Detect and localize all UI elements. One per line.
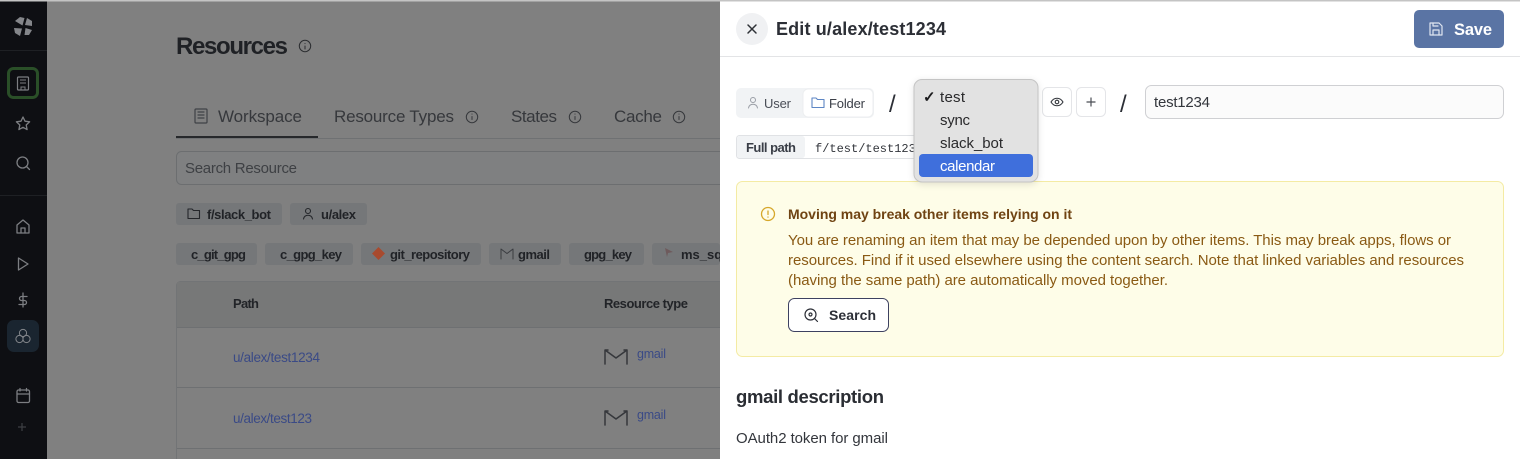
row: test1234	[233, 347, 666, 365]
icon: info	[299, 40, 311, 52]
folder dropdown menu: slack_bot	[940, 135, 1004, 152]
alert body: (having the same path) are automatically moved together.	[788, 272, 1168, 289]
icon: play	[18, 258, 28, 270]
folder dropdown menu: ✓	[923, 89, 936, 106]
search resource input	[176, 152, 776, 184]
resource type chips: c_gpg_key	[280, 247, 343, 262]
search resource input: Search Resource	[185, 160, 297, 177]
icon: dollar	[19, 293, 27, 307]
resource table: Resource type	[604, 296, 688, 311]
icon: workspace selected	[8, 68, 38, 98]
top edge line	[0, 0, 1520, 2]
owner toggle	[736, 88, 874, 118]
icon: star	[16, 117, 30, 130]
full path	[736, 136, 936, 158]
row: test123: u/alex/test123	[233, 411, 312, 426]
resource type chips	[176, 243, 726, 265]
name input: test1234	[1154, 94, 1210, 111]
alert body: You are renaming an item that may be depended upon by other items. This may break apps, flows or	[788, 232, 1451, 249]
edit drawer panel	[720, 0, 1520, 459]
row: test1234: gmail	[637, 347, 666, 361]
icon: calendar	[17, 388, 30, 402]
folder and user filter chips: f/slack_bot	[207, 207, 272, 222]
icon: search	[17, 157, 30, 170]
icon: home	[17, 220, 29, 233]
slash separator: /	[889, 91, 896, 118]
tabs: Workspace	[218, 107, 302, 126]
alert heading: Moving may break other items relying on it	[788, 206, 1072, 222]
close button	[736, 13, 768, 45]
page heading: Resources: Resources	[176, 33, 288, 60]
row: test123	[233, 408, 666, 426]
owner toggle: Folder	[829, 96, 866, 111]
tabs: Resource Types	[334, 107, 454, 126]
resource table: Path	[233, 296, 259, 311]
folder dropdown menu	[914, 80, 1038, 184]
folder and user filter chips	[176, 203, 367, 225]
folder and user filter chips: u/alex	[321, 207, 357, 222]
warning alert	[736, 182, 1504, 356]
name input	[1146, 86, 1504, 118]
folder dropdown menu: sync	[940, 112, 970, 129]
slash separator: /	[1120, 91, 1127, 118]
drawer title: Edit u/alex/test1234	[776, 19, 946, 39]
description heading: gmail description	[736, 386, 884, 407]
icon: resources active	[7, 320, 39, 352]
search button: Search	[829, 307, 876, 323]
icon: warning	[762, 208, 774, 220]
full path: Full path	[746, 140, 796, 155]
tabs: Cache	[614, 107, 662, 126]
folder dropdown menu: test	[940, 89, 966, 106]
resource table	[176, 282, 737, 459]
row: test1234: u/alex/test1234	[233, 350, 320, 365]
sidebar	[0, 0, 47, 459]
alert body: resources. Find if it used elsewhere using the content search. Note that linked variables and resources	[788, 252, 1464, 269]
alert body	[788, 232, 1464, 289]
owner toggle: User	[764, 96, 792, 111]
resource type chips: ms_sql	[681, 247, 726, 262]
full path: f/test/test1234	[815, 142, 923, 156]
eye and plus buttons	[1042, 88, 1106, 116]
tabs: States	[511, 107, 557, 126]
search button	[788, 298, 888, 332]
save button	[1414, 10, 1504, 48]
resource type chips: gpg_key	[584, 247, 633, 262]
icon: plus	[18, 423, 26, 431]
save button: Save	[1454, 21, 1492, 39]
row: test123: gmail	[637, 408, 666, 422]
resource type chips: c_git_gpg	[191, 247, 246, 262]
icon: logo pinwheel	[14, 17, 32, 36]
folder dropdown menu: calendar	[940, 158, 995, 175]
tabs	[176, 107, 720, 139]
drawer header	[720, 10, 1520, 57]
resource type chips: gmail	[518, 247, 550, 262]
description text: OAuth2 token for gmail	[736, 430, 888, 447]
resource type chips: git_repository	[390, 247, 471, 262]
